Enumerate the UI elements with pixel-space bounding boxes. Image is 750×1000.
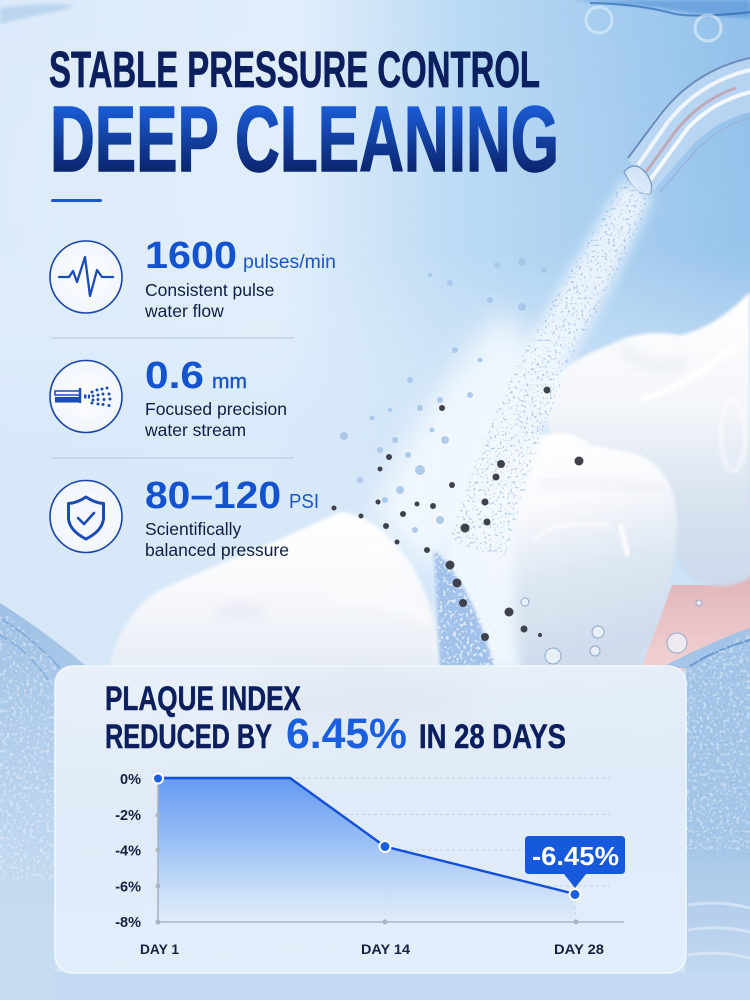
description: Focused precision	[145, 399, 287, 419]
stat: 80–120	[145, 475, 281, 517]
panel heading	[105, 680, 566, 758]
stat: 0.6	[145, 355, 204, 397]
illustration: teeth, gum and water jet	[108, 58, 750, 670]
description: Consistent pulse	[145, 280, 274, 300]
axes	[158, 778, 624, 922]
x axis labels	[140, 941, 604, 957]
unit: PSI	[289, 491, 319, 513]
area under curve	[158, 778, 575, 922]
feature: 0.6 mm	[50, 355, 287, 440]
x axis labels: DAY 28	[554, 941, 604, 957]
panel heading: REDUCED BY	[105, 718, 272, 756]
x axis labels: DAY 1	[140, 941, 179, 957]
title	[49, 41, 559, 191]
callout: -6.45%	[532, 841, 619, 871]
y axis labels: 0%	[120, 772, 141, 788]
tooth: front centre molar	[476, 433, 677, 668]
y axis labels: -4%	[115, 844, 141, 860]
panel heading: IN 28 DAYS	[419, 718, 566, 756]
y axis labels: -6%	[115, 880, 141, 896]
description: water flow	[144, 301, 224, 321]
panel: plaque index chart	[55, 666, 686, 973]
icon: nozzle spray	[50, 360, 122, 432]
unit: pulses/min	[243, 252, 336, 273]
description: water stream	[144, 420, 246, 440]
water jet nozzle tube	[624, 58, 750, 194]
callout	[525, 836, 625, 888]
panel heading: PLAQUE INDEX	[105, 680, 301, 718]
trend line	[158, 778, 575, 894]
icon: pulse wave	[50, 241, 122, 313]
stat: 1600	[145, 235, 237, 277]
y axis labels: -8%	[115, 915, 141, 931]
data points	[153, 774, 580, 900]
tooth: back right molar	[535, 292, 750, 586]
y axis labels: -2%	[115, 808, 141, 824]
description: balanced pressure	[145, 540, 289, 560]
water stream	[372, 178, 652, 668]
line chart	[115, 772, 625, 957]
corner water waves and side water	[0, 603, 750, 1000]
feature: 80-120 PSI	[50, 475, 319, 560]
gum	[640, 575, 750, 670]
unit: mm	[212, 371, 247, 393]
splash droplets	[340, 258, 547, 533]
icon: shield check	[50, 480, 122, 552]
feature: 1600 pulses/min	[50, 235, 336, 321]
panel heading: 6.45%	[286, 710, 407, 758]
title accent bar	[51, 199, 102, 202]
y axis labels	[115, 772, 141, 931]
debris particles	[332, 386, 584, 641]
tooth: front left molar	[108, 512, 441, 670]
x axis labels: DAY 14	[361, 941, 410, 957]
description: Scientifically	[145, 519, 242, 539]
clear bubbles	[521, 598, 702, 664]
